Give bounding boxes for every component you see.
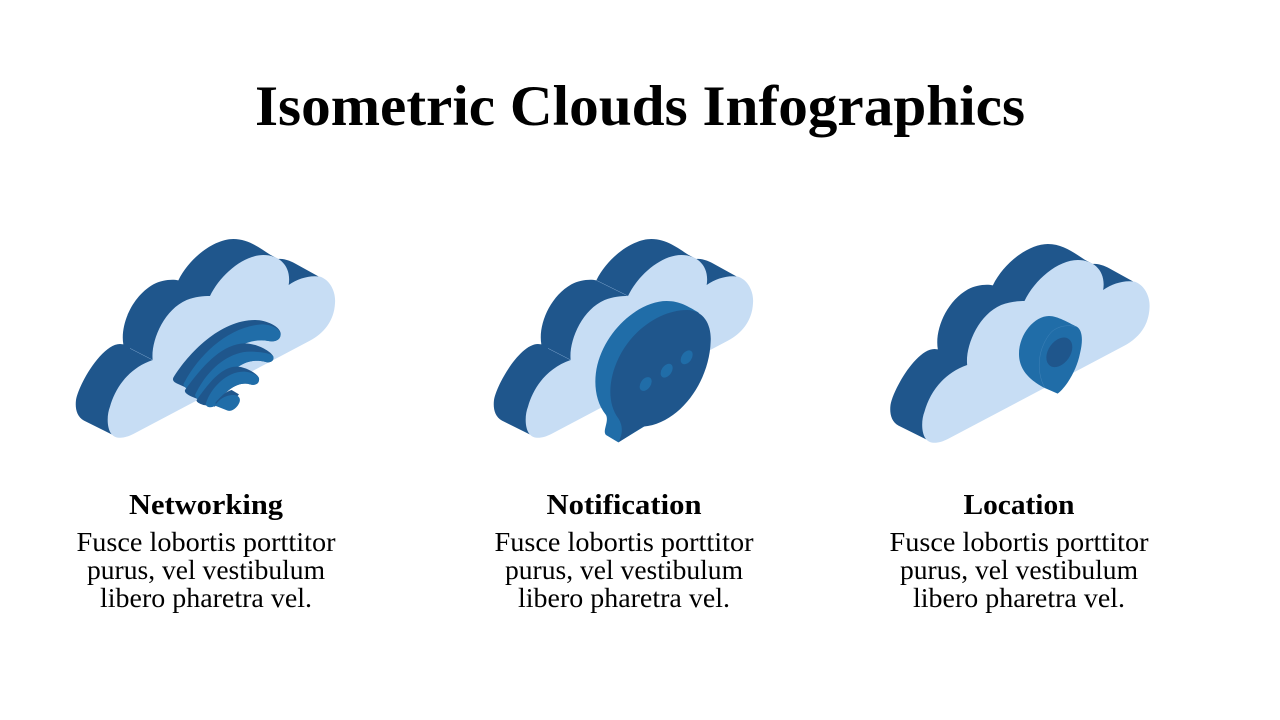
text block: location: Fusce lobortis porttitor [890, 527, 1149, 557]
text block: notification [494, 527, 754, 613]
panel: location [890, 244, 1150, 613]
icon: wifi [173, 320, 281, 411]
heading: notification: Notification [546, 489, 702, 521]
panel: notification [494, 239, 754, 613]
text block: networking: libero pharetra vel. [100, 583, 312, 613]
text block: location [890, 527, 1149, 613]
icon: networking cloud [76, 239, 335, 438]
text block: networking: Fusce lobortis porttitor [76, 527, 336, 557]
title: Isometric Clouds Infographics [255, 75, 1025, 138]
icon: location pin [1019, 316, 1082, 394]
text block: location: purus, vel vestibulum [900, 555, 1138, 585]
text block: networking: purus, vel vestibulum [87, 555, 325, 585]
text block: notification: Fusce lobortis porttitor [494, 527, 754, 557]
text block: networking [76, 527, 336, 613]
icon: speech bubble [595, 301, 711, 442]
text block: notification: libero pharetra vel. [518, 583, 730, 613]
heading: networking: Networking [129, 489, 284, 521]
heading: location: Location [964, 489, 1074, 521]
panel: networking [76, 239, 336, 613]
text block: notification: purus, vel vestibulum [505, 555, 743, 585]
text block: location: libero pharetra vel. [913, 583, 1125, 613]
icon: location cloud [890, 244, 1150, 443]
icon: notification cloud [494, 239, 753, 442]
